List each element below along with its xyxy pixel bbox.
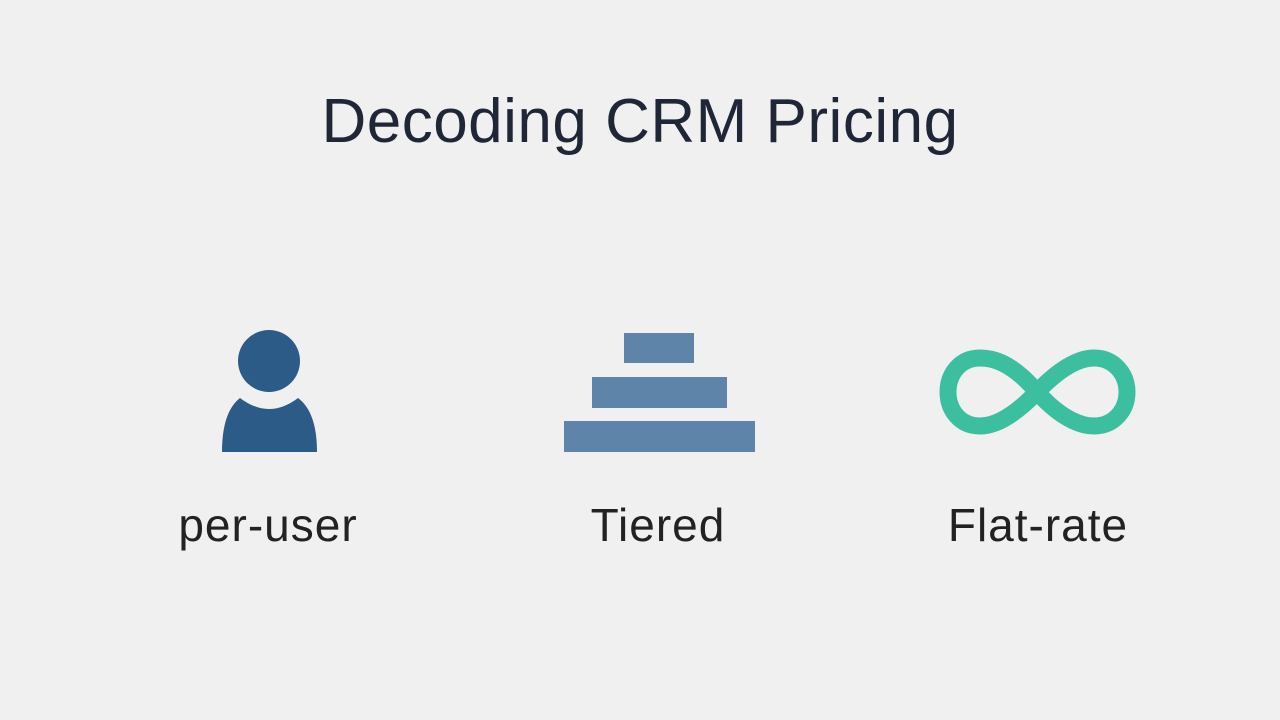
label: tiered: Tiered bbox=[591, 499, 725, 551]
title: Decoding CRM Pricing bbox=[321, 87, 959, 156]
label: per-user: per-user bbox=[178, 499, 358, 551]
label: flat-rate: Flat-rate bbox=[948, 499, 1128, 551]
icon: person bbox=[222, 330, 317, 452]
icon: infinity bbox=[948, 358, 1127, 426]
icon: tiers bbox=[564, 333, 755, 452]
